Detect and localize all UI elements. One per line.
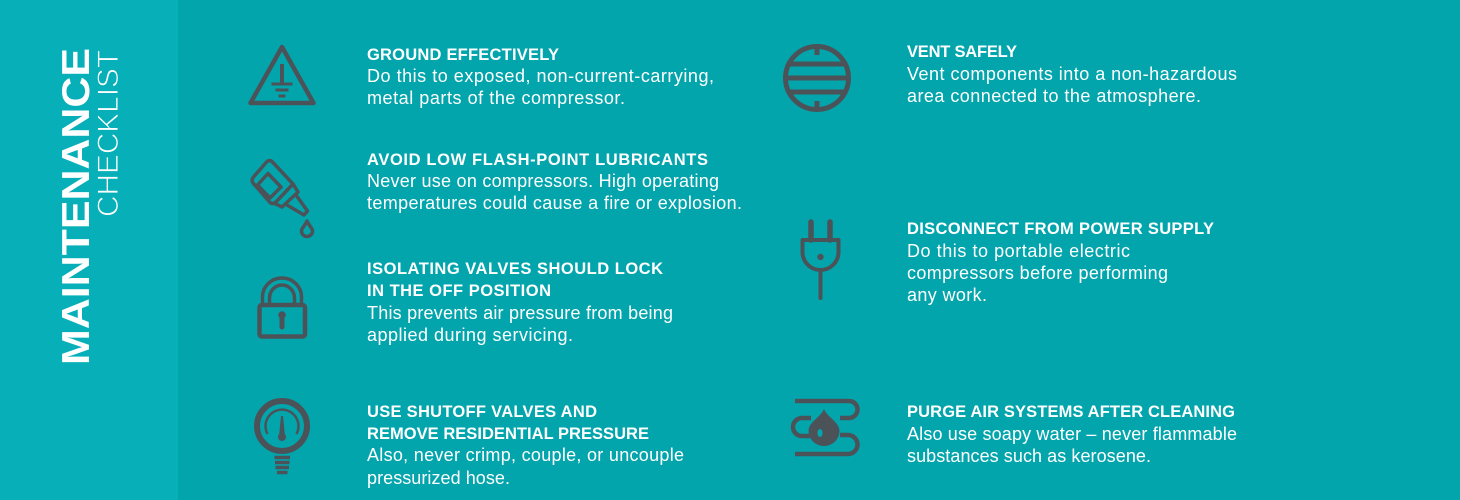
heading <box>367 260 663 300</box>
heading: USE SHUTOFF VALVES AND <box>367 403 597 421</box>
icon: pressure gauge <box>257 401 307 472</box>
text block <box>367 445 684 488</box>
item: disconnect from power supply <box>802 220 1214 305</box>
text block <box>907 424 1237 466</box>
heading: AVOID LOW FLASH-POINT LUBRICANTS <box>367 151 708 169</box>
text block: Do this to portable electric <box>907 241 1130 261</box>
text block: compressors before performing <box>907 263 1168 283</box>
heading: PURGE AIR SYSTEMS AFTER CLEANING <box>907 403 1235 421</box>
title: maintenance: MAINTENANCE <box>55 48 98 365</box>
text block: This prevents air pressure from being <box>367 303 673 323</box>
icon: ground warning triangle <box>250 47 314 103</box>
heading: DISCONNECT FROM POWER SUPPLY <box>907 220 1214 238</box>
text block <box>367 303 673 345</box>
heading: VENT SAFELY <box>907 43 1017 61</box>
subtitle: checklist: CHECKLIST <box>92 50 125 217</box>
item: vent safely <box>785 43 1237 110</box>
heading <box>367 403 649 443</box>
text block <box>367 171 742 213</box>
text block <box>367 66 714 108</box>
text block: pressurized hose. <box>367 468 510 488</box>
text block <box>907 64 1237 106</box>
heading: GROUND EFFECTIVELY <box>367 46 559 64</box>
text block: temperatures could cause a fire or explosion. <box>367 193 742 213</box>
text block: Vent components into a non-hazardous <box>907 64 1237 84</box>
heading: ISOLATING VALVES SHOULD LOCK <box>367 260 663 278</box>
icon: electric plug <box>802 222 838 298</box>
text block <box>907 241 1168 305</box>
text block: any work. <box>907 285 987 305</box>
heading: IN THE OFF POSITION <box>367 282 551 300</box>
icon: padlock <box>260 278 305 336</box>
panel: title sidebar <box>0 0 178 500</box>
text block: substances such as kerosene. <box>907 446 1151 466</box>
item: shutoff valves <box>257 401 684 488</box>
text block: Also, never crimp, couple, or uncouple <box>367 445 684 465</box>
text block: Also use soapy water – never flammable <box>907 424 1237 444</box>
item: ground effectively <box>250 46 714 108</box>
icon: round vent <box>785 46 849 110</box>
item: purge air systems <box>793 401 1237 466</box>
text block: Do this to exposed, non-current-carrying, <box>367 66 714 86</box>
text block: Never use on compressors. High operating <box>367 171 719 191</box>
icon: oil drop with pipe <box>793 401 858 454</box>
text block: applied during servicing. <box>367 325 573 345</box>
text block: area connected to the atmosphere. <box>907 86 1201 106</box>
item: avoid low flash-point lubricants <box>252 151 742 236</box>
icon: oil bottle with drop <box>252 161 312 236</box>
text block: metal parts of the compressor. <box>367 88 625 108</box>
heading: REMOVE RESIDENTIAL PRESSURE <box>367 425 649 443</box>
item: isolating valves <box>260 260 673 345</box>
